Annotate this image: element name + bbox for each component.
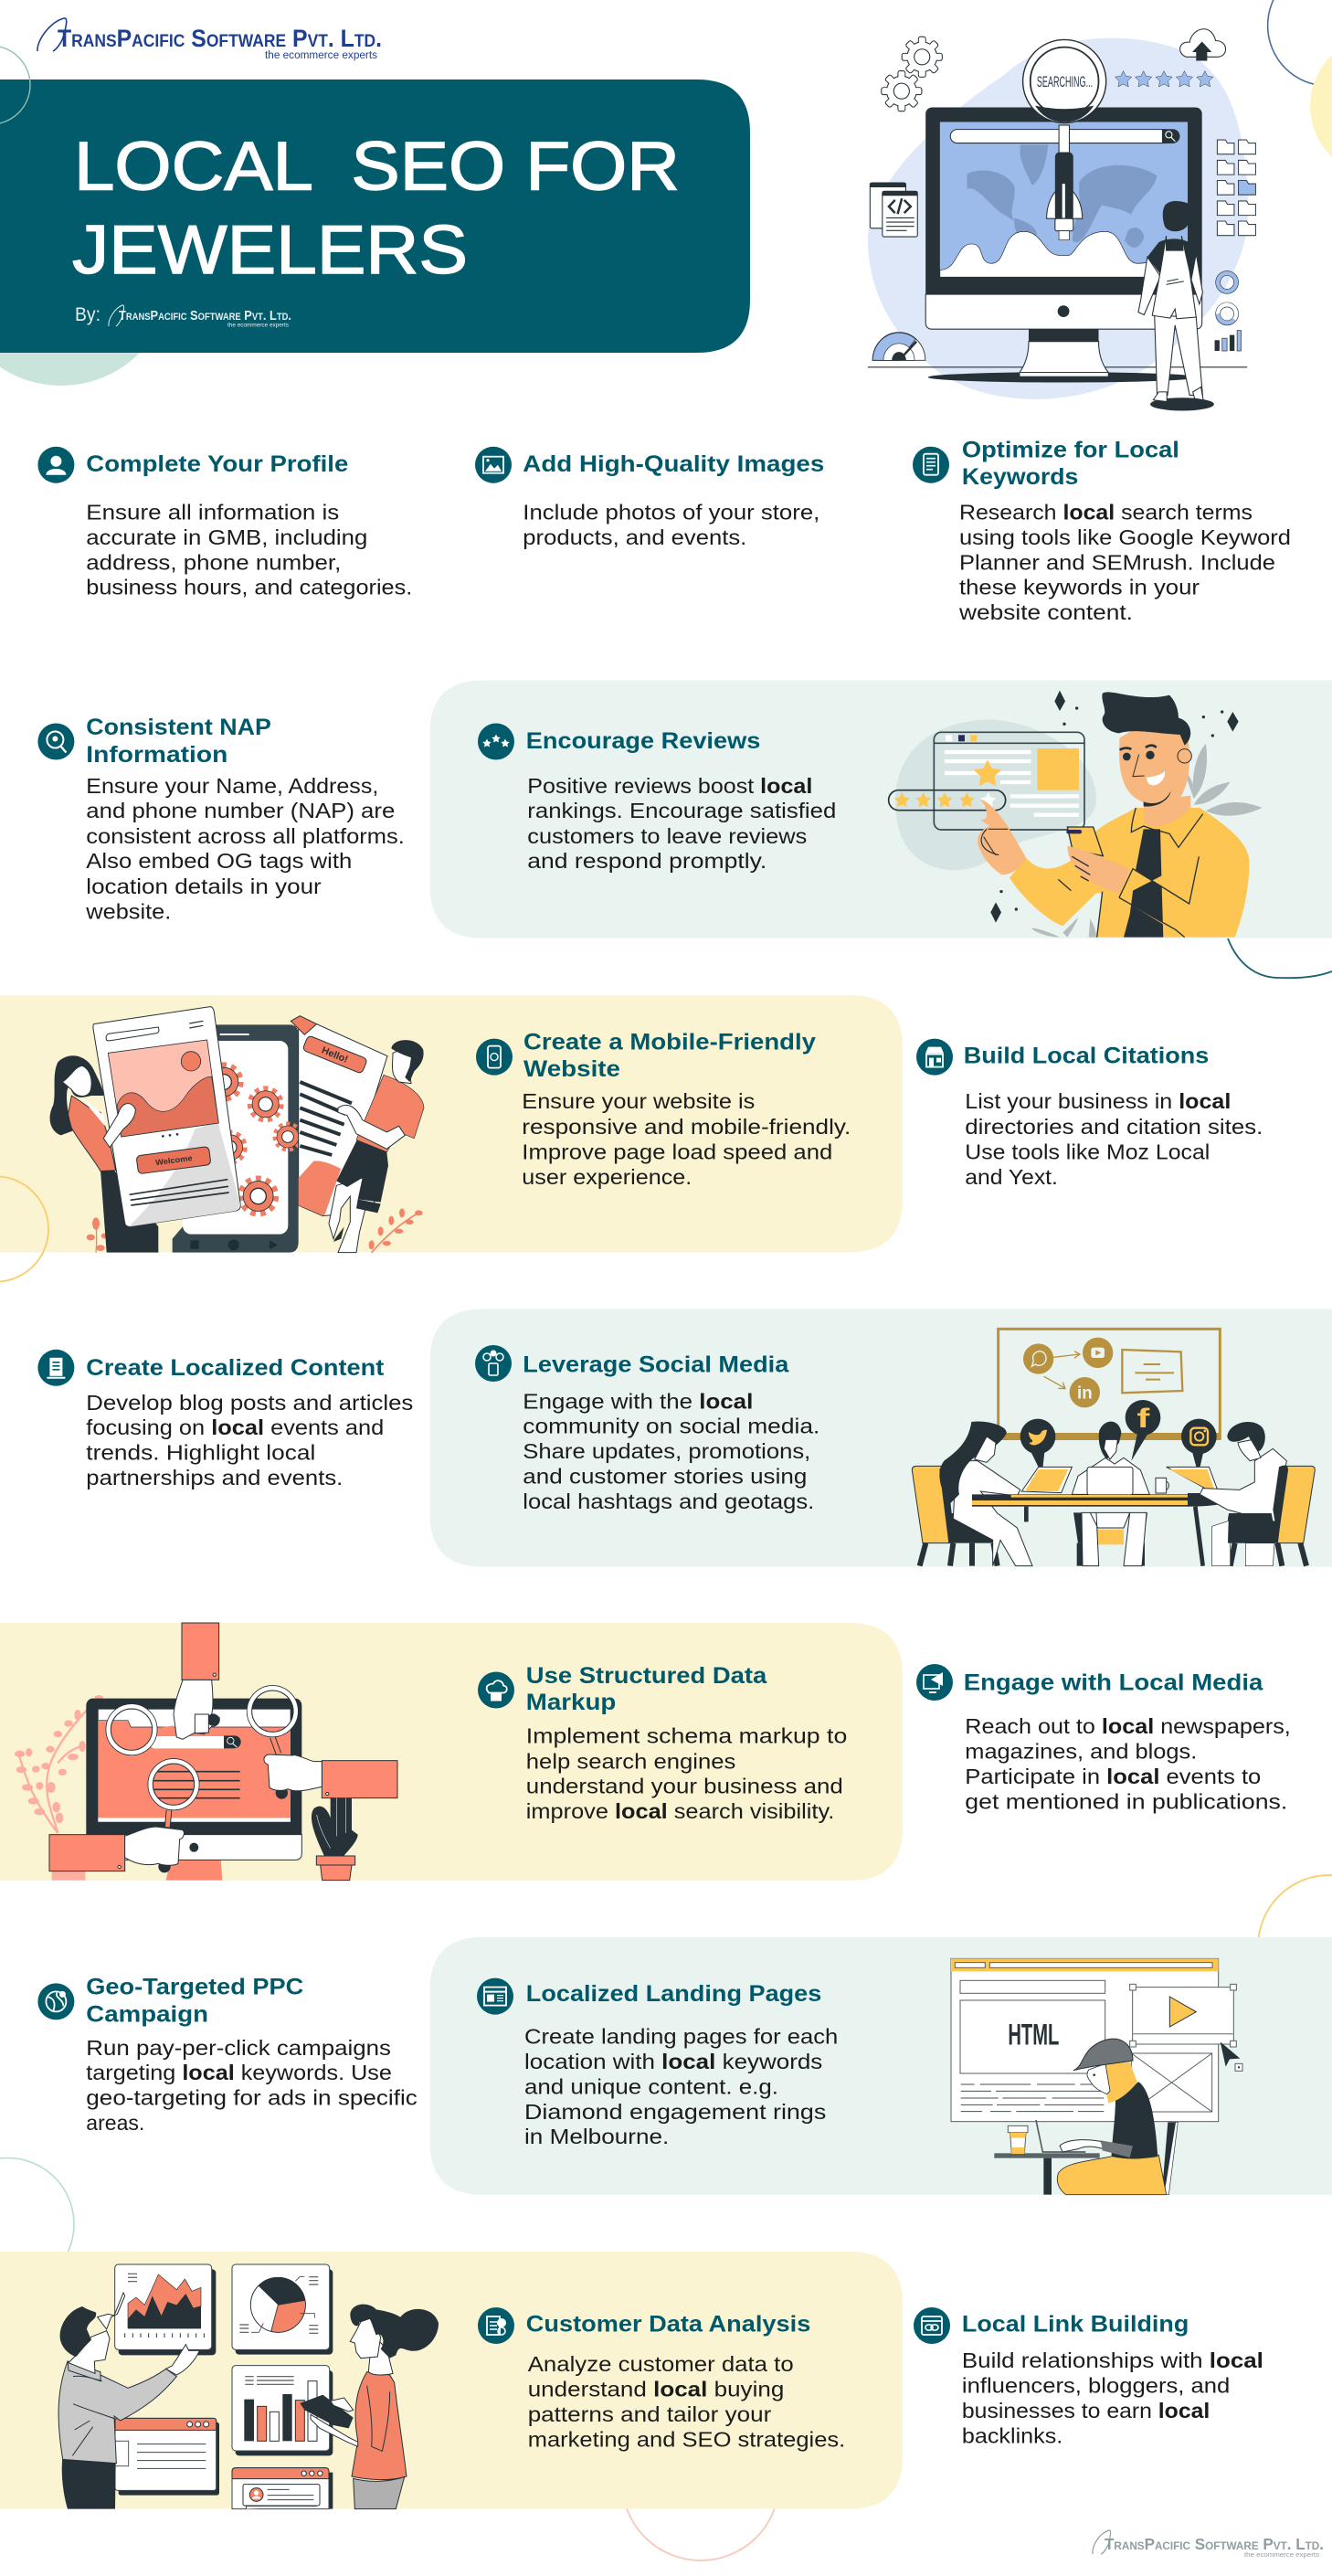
heading: Website	[523, 1056, 620, 1082]
panel: markup yellow	[0, 1623, 903, 1881]
body text	[528, 2352, 845, 2451]
body text: website.	[85, 900, 171, 924]
heading: Information	[86, 742, 227, 768]
body text: List your business in local	[965, 1089, 1231, 1113]
heading: Create Localized Content	[86, 1355, 385, 1381]
body text: Planner and SEMrush. Include	[959, 550, 1275, 574]
heading: Create a Mobile-Friendly	[523, 1030, 816, 1055]
icon: globe target	[37, 1983, 74, 2019]
decorative circle: top right yellow	[1310, 36, 1332, 176]
body text: and customer stories using	[523, 1465, 807, 1489]
byline with logo: the ecommerce experts	[227, 322, 290, 329]
illustration: mobile screens	[50, 1007, 424, 1253]
icon: stars	[478, 724, 514, 760]
item: Leverage Social Media	[475, 1345, 819, 1513]
decorative arc: top right blue	[1268, 0, 1332, 86]
body text: community on social media.	[523, 1415, 819, 1438]
body text: using tools like Google Keyword	[959, 525, 1291, 549]
body text: improve local search visibility.	[526, 1799, 834, 1823]
byline with logo: TransPacific Software Pvt. Ltd.	[119, 308, 291, 323]
body text	[523, 1389, 819, 1513]
body text: help search engines	[526, 1750, 735, 1774]
icon: content page	[37, 1350, 74, 1386]
body text: magazines, and blogs.	[965, 1740, 1197, 1764]
panel: data yellow	[0, 2252, 903, 2509]
decorative arc: yellow left	[0, 1176, 48, 1282]
panel: social green	[429, 1309, 1332, 1567]
icon: image	[475, 447, 512, 483]
logo: footer	[1093, 2530, 1324, 2559]
heading	[86, 1974, 303, 2028]
item: Optimize for Local Keywords	[913, 437, 1291, 624]
body text: Analyze customer data to	[528, 2352, 794, 2376]
item: Customer Data Analysis	[478, 2307, 845, 2451]
heading: Encourage Reviews	[526, 728, 760, 754]
item: Geo-Targeted PPC Campaign	[37, 1974, 418, 2135]
heading: Complete Your Profile	[86, 451, 348, 477]
illustration: team social media meeting: in	[1077, 1384, 1093, 1404]
body text: rankings. Encourage satisfied	[527, 799, 836, 822]
icon: megaphone screen	[916, 1664, 953, 1701]
body text	[527, 774, 836, 873]
item: Use Structured Data Markup	[478, 1663, 847, 1823]
decorative arc: top left circle	[0, 46, 30, 124]
body text: partnerships and events.	[86, 1466, 343, 1489]
heading: Build Local Citations	[964, 1044, 1209, 1069]
logo: TransPacific header: TransPacific Software Pvt. Ltd.	[58, 25, 382, 52]
body text: location with local keywords	[524, 2050, 822, 2073]
item: Local Link Building	[914, 2307, 1263, 2447]
body text: Include photos of your store,	[523, 500, 819, 524]
item: Engage with Local Media	[916, 1664, 1291, 1813]
body text: Diamond engagement rings	[524, 2100, 826, 2124]
icon: data report	[478, 2307, 514, 2344]
item: Create a Mobile-Friendly Website	[476, 1030, 851, 1189]
body text: targeting local keywords. Use	[86, 2061, 392, 2084]
body text: Ensure your Name, Address,	[86, 774, 378, 798]
banner panel	[0, 80, 750, 353]
title: LOCAL SEO FOR	[74, 128, 680, 205]
body text: and Yext.	[965, 1165, 1058, 1189]
body text: Reach out to local newspapers,	[965, 1714, 1291, 1738]
body text: customers to leave reviews	[527, 824, 807, 848]
illustration: monitor search	[868, 29, 1255, 411]
title	[72, 128, 680, 288]
body text: Improve page load speed and	[522, 1140, 832, 1164]
item: Add High-Quality Images	[475, 447, 824, 549]
heading	[86, 715, 271, 768]
decorative arc: pale teal left	[0, 2158, 74, 2290]
body text	[965, 1089, 1263, 1189]
body text: local hashtags and geotags.	[523, 1489, 814, 1513]
heading: Local Link Building	[962, 2312, 1189, 2337]
illustration: magnifiers on monitor	[15, 1623, 397, 1881]
body text	[86, 500, 412, 599]
body text: Build relationships with local	[962, 2348, 1263, 2372]
item: Encourage Reviews	[478, 724, 836, 873]
body text	[86, 2036, 418, 2135]
panel: mobile yellow	[0, 995, 903, 1252]
logo: TransPacific header: the ecommerce experts	[265, 50, 377, 61]
body text	[962, 2348, 1263, 2447]
decorative arc: pink bottom	[622, 2403, 779, 2560]
body text: Also embed OG tags with	[86, 849, 352, 873]
body text: and respond promptly.	[527, 849, 766, 873]
byline with logo	[75, 304, 291, 329]
illustration: mobile screens: Welcome	[155, 1153, 193, 1167]
body text: user experience.	[522, 1165, 692, 1189]
body text: areas.	[86, 2111, 144, 2135]
illustration: HTML designer at laptop	[951, 1958, 1242, 2195]
body text: Implement schema markup to	[526, 1723, 847, 1747]
illustration: team social media meeting	[912, 1329, 1315, 1566]
body text	[523, 500, 819, 549]
body text: Run pay-per-click campaigns	[86, 2036, 391, 2060]
item: Complete Your Profile	[37, 447, 412, 599]
body text	[526, 1723, 847, 1823]
body text: Develop blog posts and articles	[86, 1391, 413, 1415]
body text: businesses to earn local	[962, 2399, 1210, 2422]
body text: Participate in local events to	[965, 1765, 1261, 1788]
icon: location search	[37, 724, 74, 760]
body text: Create landing pages for each	[524, 2024, 838, 2048]
heading: Engage with Local Media	[964, 1670, 1264, 1696]
heading: Use Structured Data	[526, 1663, 767, 1689]
icon: landing page	[477, 1978, 513, 2015]
body text: focusing on local events and	[86, 1415, 384, 1439]
heading: Geo-Targeted PPC	[86, 1974, 303, 1999]
heading: Consistent NAP	[86, 715, 271, 740]
icon: profile	[37, 447, 74, 483]
illustration: monitor search: SEARCHING...	[1037, 74, 1093, 90]
icon: storefront	[916, 1039, 953, 1076]
body text: location details in your	[86, 875, 322, 898]
body text	[522, 1089, 851, 1189]
body text: Use tools like Moz Local	[965, 1140, 1210, 1164]
body text: patterns and tailor your	[528, 2402, 772, 2426]
heading: Customer Data Analysis	[526, 2312, 810, 2337]
body text	[86, 1391, 413, 1489]
body text: address, phone number,	[86, 550, 341, 574]
body text: understand your business and	[526, 1774, 843, 1797]
icon: mobile	[476, 1039, 513, 1076]
decorative arc: teal below reviews panel	[1228, 938, 1332, 978]
body text	[524, 2024, 838, 2148]
heading: Markup	[526, 1690, 616, 1715]
item: Create Localized Content	[37, 1350, 413, 1489]
body text	[965, 1714, 1291, 1813]
icon: link window	[914, 2307, 950, 2344]
item: Localized Landing Pages	[477, 1978, 838, 2148]
body text: business hours, and categories.	[86, 576, 412, 599]
body text: Share updates, promotions,	[523, 1439, 810, 1463]
logo: TransPacific header	[37, 18, 382, 61]
title: JEWELERS	[72, 211, 468, 288]
illustration: team social media meeting: f	[1136, 1404, 1150, 1434]
body text: and phone number (NAP) are	[86, 799, 395, 822]
illustration: data analysis team	[58, 2264, 439, 2509]
item: Build Local Citations	[916, 1039, 1263, 1189]
body text: website content.	[958, 600, 1133, 624]
decorative arc: yellow upper right of landing pages	[1258, 1875, 1332, 2018]
body text: Research local search terms	[959, 500, 1253, 524]
body text: accurate in GMB, including	[86, 525, 367, 549]
icon: cloud data	[478, 1672, 514, 1709]
heading	[526, 1663, 767, 1715]
heading: Campaign	[86, 2002, 208, 2028]
byline with logo: By:	[75, 304, 100, 325]
body text: directories and citation sites.	[965, 1115, 1263, 1139]
item: Consistent NAP Information	[37, 715, 405, 924]
body text	[85, 774, 405, 924]
heading: Localized Landing Pages	[526, 1981, 821, 2007]
body text: consistent across all platforms.	[86, 824, 405, 848]
body text: in Melbourne.	[524, 2125, 669, 2148]
body text: Ensure all information is	[86, 500, 339, 524]
panel: landing green	[429, 1937, 1332, 2195]
illustration: man rating stars	[889, 691, 1263, 938]
body text: Ensure your website is	[522, 1089, 755, 1113]
heading	[962, 437, 1179, 490]
icon: social network	[475, 1345, 512, 1382]
panel: reviews green	[429, 680, 1332, 938]
heading	[523, 1030, 816, 1082]
body text: backlinks.	[962, 2423, 1062, 2447]
body text: influencers, bloggers, and	[962, 2374, 1230, 2398]
body text: understand local buying	[528, 2378, 784, 2401]
body text: these keywords in your	[959, 576, 1200, 599]
body text: and unique content. e.g.	[524, 2075, 778, 2099]
icon: document	[913, 447, 949, 483]
illustration: mobile screens: Hello!	[320, 1044, 350, 1065]
heading: Keywords	[962, 464, 1078, 490]
body text	[958, 500, 1291, 624]
heading: Optimize for Local	[962, 437, 1179, 462]
body text: products, and events.	[523, 525, 746, 549]
heading: Add High-Quality Images	[523, 451, 824, 477]
body text: Engage with the local	[523, 1389, 753, 1413]
illustration: HTML designer at laptop: HTML	[1008, 2017, 1059, 2051]
body text: geo-targeting for ads in specific	[86, 2086, 418, 2110]
body text: get mentioned in publications.	[965, 1789, 1287, 1813]
body text: trends. Highlight local	[86, 1441, 315, 1465]
heading: Leverage Social Media	[523, 1352, 789, 1378]
body text: Positive reviews boost local	[527, 774, 812, 798]
logo: footer: TransPacific Software Pvt. Ltd.	[1105, 2535, 1324, 2553]
body text: responsive and mobile-friendly.	[522, 1115, 851, 1139]
body text: marketing and SEO strategies.	[528, 2427, 845, 2451]
decorative circle: mint under banner	[0, 164, 172, 386]
logo: footer: the ecommerce experts	[1244, 2550, 1319, 2559]
